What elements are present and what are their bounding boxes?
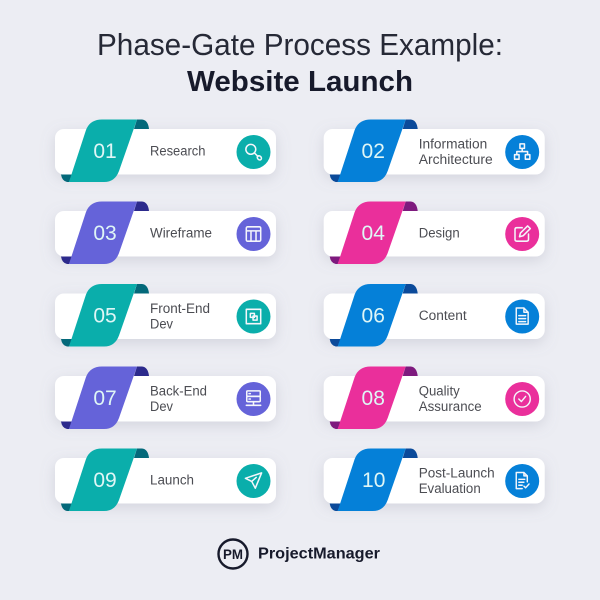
step 08: Quality Assurance: 08: [362, 387, 385, 410]
step 10: Post-Launch Evaluation: Evaluation: [419, 481, 481, 496]
step 06: Content: Content: [419, 308, 467, 323]
step 08: Quality Assurance: Quality: [419, 384, 460, 398]
step 03: Wireframe: Wireframe: [150, 226, 212, 240]
step 05: Front-End Dev: 05: [93, 304, 117, 328]
step 03: Wireframe: [55, 202, 276, 264]
step 06: Content: [324, 284, 545, 346]
title: [97, 27, 503, 98]
step 05: Front-End Dev: Front-End: [150, 301, 210, 316]
step 10: Post-Launch Evaluation: 10: [362, 469, 385, 492]
step 09: Launch: Launch: [150, 472, 194, 488]
step 02: Information Architecture: Architecture: [419, 152, 493, 167]
step 07: Back-End Dev: 07: [93, 387, 117, 410]
step 08: Quality Assurance: Assurance: [419, 399, 482, 414]
step 05: Front-End Dev: Dev: [150, 316, 173, 332]
title: Phase-Gate Process Example:: [97, 27, 503, 62]
step 02: Information Architecture: [324, 120, 545, 182]
step 01: Research: Research: [150, 144, 206, 158]
step 05: Front-End Dev: [55, 284, 276, 346]
step 10: Post-Launch Evaluation: Post-Launch: [419, 466, 495, 480]
step 02: Information Architecture: Information: [419, 136, 487, 152]
title: Website Launch: [187, 66, 413, 98]
step 06: Content: 06: [362, 304, 385, 328]
step 04: Design: 04: [362, 222, 385, 245]
logo: ProjectManager: PM: [223, 546, 243, 562]
step 07: Back-End Dev: [55, 366, 276, 429]
step 01: Research: 01: [93, 140, 117, 163]
step 08: Quality Assurance: [324, 366, 545, 429]
step 03: Wireframe: 03: [93, 222, 117, 245]
step 07: Back-End Dev: Dev: [150, 399, 173, 414]
step 09: Launch: [55, 448, 276, 511]
logo: ProjectManager: ProjectManager: [258, 546, 380, 562]
step 01: Research: [55, 120, 276, 182]
step 10: Post-Launch Evaluation: [324, 448, 545, 511]
step 09: Launch: 09: [93, 469, 117, 492]
step 04: Design: [324, 202, 545, 264]
step 02: Information Architecture: 02: [362, 140, 385, 163]
step 04: Design: Design: [419, 226, 460, 240]
step 07: Back-End Dev: Back-End: [150, 384, 207, 398]
logo: ProjectManager: [218, 540, 380, 568]
